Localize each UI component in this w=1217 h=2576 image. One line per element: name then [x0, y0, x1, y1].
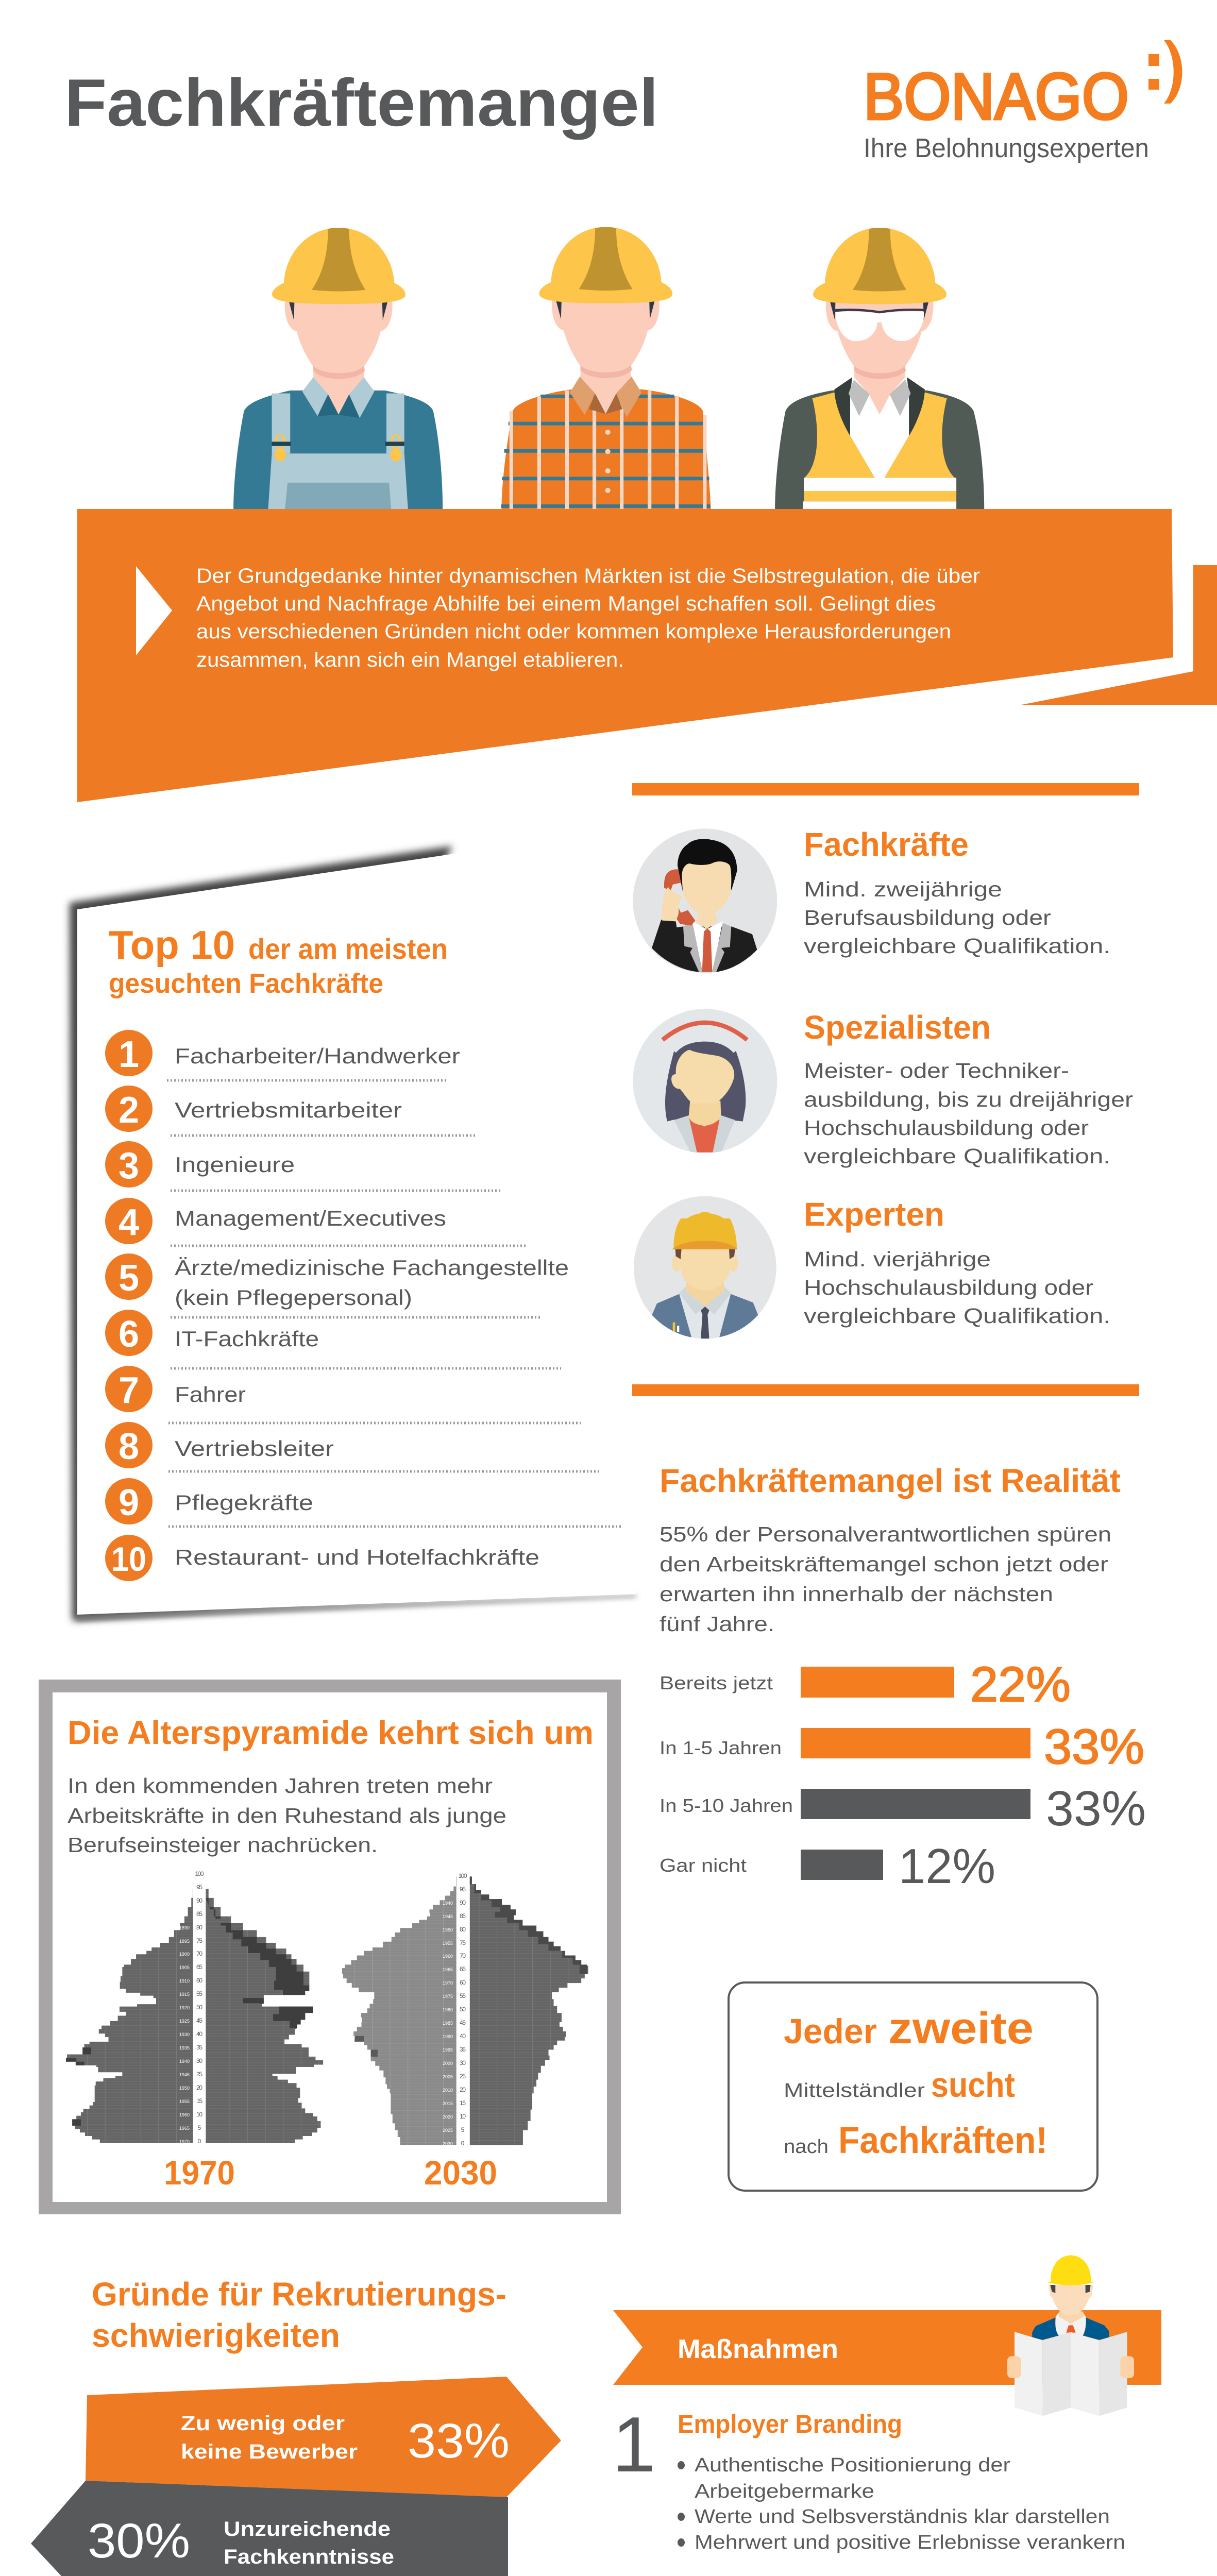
- list rows: 6: [119, 1314, 139, 1355]
- measure 1: Employer Branding: [612, 2401, 1125, 2553]
- heading: Gründe: [92, 2276, 506, 2354]
- panel: Spezialisten: [633, 1009, 1133, 1168]
- chart: population pyramid 1970: 75: [196, 1937, 202, 1944]
- panel: Fachkräfte: Berufsausbildung oder: [804, 906, 1051, 929]
- list rows: Fahrer: [175, 1382, 246, 1406]
- callout: Jeder zweite: nach: [784, 2136, 829, 2158]
- chart: population pyramid 2030: 1985: [443, 2021, 453, 2026]
- chart: population pyramid 2030: 55: [460, 1992, 466, 1999]
- chart: population pyramid 2030: 20: [460, 2086, 466, 2093]
- panel: top 10 list: [70, 846, 636, 1621]
- panel: Experten: Mind. vierjährige: [804, 1247, 991, 1271]
- icon: woman with headset: [633, 1009, 777, 1153]
- panel: Fachkräfte: vergleichbare Qualifikation.: [804, 934, 1110, 958]
- chart: population pyramid 1970: 1960: [179, 2112, 190, 2117]
- bar chart: timing: 12%: [899, 1839, 995, 1894]
- measure 1: Employer Branding: 1: [612, 2401, 656, 2488]
- chart: population pyramid 2030: 2020: [443, 2114, 453, 2120]
- heading: Fachkräftemangel ist Realität: Fachkräftemangel ist Realität: [660, 1462, 1121, 1499]
- callout: Jeder zweite: zweite: [888, 2004, 1034, 2053]
- heading: Alterspyramide: Die Alterspyramide kehrt sich um: [67, 1714, 594, 1751]
- chart: population pyramid 2030: 60: [460, 1979, 466, 1986]
- panel: Experten: [634, 1196, 1110, 1340]
- text block: 55 percent: den Arbeitskräftemangel schon jetzt oder: [660, 1552, 1108, 1576]
- bar chart: timing: 33%: [1044, 1719, 1144, 1774]
- bar chart: timing: [660, 1657, 1146, 1894]
- chart: population pyramid 2030: 65: [460, 1965, 466, 1973]
- chart: population pyramid 1970: 5: [198, 2124, 201, 2131]
- panel: intro banner: [77, 509, 1217, 802]
- list rows: 7: [119, 1370, 139, 1411]
- panel: intro banner: zusammen, kann sich ein Mangel etablieren.: [196, 649, 624, 671]
- list rows: 4: [119, 1202, 139, 1243]
- chart: population pyramid 1970: 1945: [179, 2072, 190, 2077]
- chart: population pyramid 2030: 85: [460, 1912, 466, 1920]
- chart: population pyramid 2030: 1940: [443, 1901, 453, 1906]
- bar chart: timing: Gar nicht: [660, 1855, 747, 1876]
- text block: 55 percent: fünf Jahre.: [660, 1612, 774, 1636]
- chart: population pyramid 2030: 1970: [443, 1980, 453, 1986]
- bar chart: timing: Bereits jetzt: [660, 1672, 773, 1693]
- chart: population pyramid 1970: 1940: [179, 2059, 190, 2064]
- chart: population pyramid 1970: 1895: [179, 1939, 190, 1944]
- chart: population pyramid 2030: 1960: [443, 1954, 453, 1959]
- arrow: Unzureichende Fachkenntnisse: 30%: [88, 2514, 190, 2568]
- measure 1: Employer Branding: Werte und Selbsverständnis klar darstellen: [695, 2506, 1110, 2528]
- list rows: 5: [119, 1258, 139, 1299]
- chart: population pyramid 1970: 95: [196, 1884, 202, 1891]
- panel: Fachkräfte: [633, 826, 1110, 973]
- text block: Alterspyramide: Berufseinsteiger nachrücken.: [67, 1833, 378, 1857]
- text block: Alterspyramide: [67, 1774, 506, 1857]
- panel: Experten: Experten: [804, 1196, 944, 1233]
- chart: population pyramid 1970: 20: [196, 2084, 202, 2091]
- chart: population pyramid 2030: 70: [460, 1952, 466, 1959]
- heading: top 10: Top 10: [109, 922, 235, 968]
- chart: population pyramid 1970: 1905: [179, 1965, 190, 1970]
- panel: intro banner: Angebot und Nachfrage Abhilfe bei einem Mangel schaffen soll. Gelingt dies: [196, 592, 936, 615]
- chart: population pyramid 1970: 0: [198, 2138, 201, 2145]
- list rows: Management/Executives: [175, 1206, 446, 1230]
- chart: population pyramid 1970: 50: [196, 2004, 202, 2011]
- icon: engineer with helmet: [634, 1196, 776, 1340]
- logo: BONAGO: BONAGO: [864, 60, 1129, 133]
- chart: population pyramid 1970: 60: [196, 1977, 202, 1984]
- chart: population pyramid 2030: 90: [460, 1899, 466, 1906]
- arrow: Unzureichende Fachkenntnisse: Unzureichende: [224, 2518, 391, 2540]
- text block: 55 percent: erwarten ihn innerhalb der nächsten: [660, 1582, 1053, 1606]
- chart: population pyramid 1970: 15: [196, 2097, 202, 2105]
- list rows: 8: [119, 1426, 139, 1467]
- panel: Spezialisten: Spezialisten: [804, 1009, 991, 1046]
- panel: Alterspyramide: [39, 1680, 621, 2214]
- bar chart: timing: In 5-10 Jahren: [660, 1795, 793, 1816]
- panel: Experten: vergleichbare Qualifikation.: [804, 1304, 1110, 1328]
- chart: population pyramid 1970: 80: [196, 1924, 202, 1931]
- panel: Fachkräfte: Fachkräfte: [804, 826, 969, 863]
- logo: BONAGO: Ihre Belohnungsexperten: [864, 133, 1149, 163]
- arrow: Zu wenig oder keine Bewerber: [86, 2377, 561, 2497]
- list rows: 10: [111, 1540, 146, 1578]
- list rows: Ingenieure: [175, 1153, 295, 1177]
- panel: Spezialisten: Meister- oder Techniker-: [804, 1059, 1069, 1082]
- illustration: three workers: [233, 227, 984, 510]
- chart: population pyramid 2030: 2010: [443, 2088, 453, 2093]
- chart: population pyramid 1970: 25: [196, 2071, 202, 2078]
- bar chart: timing: 22%: [970, 1657, 1071, 1712]
- callout: Jeder zweite: Fachkräften!: [838, 2120, 1047, 2161]
- chart: population pyramid 2030: 95: [460, 1886, 466, 1893]
- chart: population pyramid 1970: 10: [196, 2111, 202, 2118]
- list rows: Vertriebsmitarbeiter: [175, 1098, 402, 1122]
- chart: population pyramid 1970: 1935: [179, 2045, 190, 2050]
- chart: population pyramid 1970: 35: [196, 2044, 202, 2051]
- year labels: 2030: [424, 2154, 497, 2192]
- chart: population pyramid 2030: 75: [460, 1939, 466, 1946]
- chart: population pyramid 2030: 2030: [443, 2141, 453, 2146]
- list rows: 3: [119, 1145, 139, 1187]
- icon: man on the phone: [633, 828, 777, 973]
- measure 1: Employer Branding: Authentische Positionierung der: [695, 2454, 1010, 2476]
- text block: Alterspyramide: Arbeitskräfte in den Ruhestand als junge: [67, 1804, 506, 1827]
- chart: population pyramid 1970: 1890: [179, 1925, 190, 1930]
- arrow: Zu wenig oder keine Bewerber: Zu wenig oder: [181, 2412, 345, 2435]
- chart: population pyramid 2030: 2025: [443, 2128, 453, 2133]
- chart: population pyramid 2030: 80: [460, 1926, 466, 1933]
- chart: population pyramid 1970: 30: [196, 2057, 202, 2064]
- chart: population pyramid 1970: 65: [196, 1963, 202, 1971]
- list rows: Ärzte/medizinische Fachangestellte: [175, 1256, 569, 1280]
- chart: population pyramid 1970: 1950: [179, 2086, 190, 2091]
- banner: Maßnahmen: Maßnahmen: [678, 2334, 838, 2364]
- list rows: Pflegekräfte: [175, 1490, 313, 1515]
- list rows: (kein Pflegepersonal): [175, 1285, 412, 1310]
- banner: Maßnahmen: [613, 2310, 1161, 2385]
- worker in plaid shirt: [501, 227, 711, 509]
- chart: population pyramid 2030: [342, 1872, 588, 2147]
- chart: population pyramid 1970: 40: [196, 2030, 202, 2038]
- chart: population pyramid 1970: 1930: [179, 2032, 190, 2037]
- heading: Gründe: Gründe für Rekrutierungs-: [92, 2276, 506, 2313]
- panel: Spezialisten: vergleichbare Qualifikation.: [804, 1144, 1110, 1168]
- chart: population pyramid 1970: 1900: [179, 1952, 190, 1957]
- arrow: Zu wenig oder keine Bewerber: 33%: [408, 2414, 510, 2468]
- year labels: 1970: [164, 2154, 235, 2192]
- chart: population pyramid 1970: 85: [196, 1910, 202, 1918]
- arrow: Unzureichende Fachkenntnisse: Fachkenntnisse: [224, 2546, 394, 2568]
- chart: population pyramid 2030: 1950: [443, 1927, 453, 1933]
- chart: population pyramid 2030: 40: [460, 2032, 466, 2040]
- chart: population pyramid 2030: 45: [460, 2019, 466, 2026]
- worker in safety vest: [775, 228, 984, 510]
- divider bar: top: [632, 783, 1139, 795]
- chart: population pyramid 2030: 25: [460, 2073, 466, 2080]
- chart: population pyramid 1970: 1965: [179, 2126, 190, 2131]
- list rows: 1: [119, 1034, 139, 1075]
- chart: population pyramid 1970: 90: [196, 1897, 202, 1904]
- panel: intro banner: Der Grundgedanke hinter dynamischen Märkten ist die Selbstregulation, die über: [196, 565, 980, 587]
- chart: population pyramid 2030: 30: [460, 2059, 466, 2066]
- chart: population pyramid 2030: 50: [460, 2006, 466, 2013]
- measure 1: Employer Branding: Mehrwert und positive Erlebnisse verankern: [695, 2532, 1125, 2553]
- chart: population pyramid 2030: 1975: [443, 1994, 453, 1999]
- chart: population pyramid 1970: 70: [196, 1950, 202, 1957]
- panel: Spezialisten: ausbildung, bis zu dreijähriger: [804, 1088, 1133, 1111]
- chart: population pyramid 1970: 1970: [179, 2139, 190, 2144]
- title: Fachkräftemangel: [64, 65, 658, 140]
- heading: top 10: gesuchten Fachkräfte: [109, 968, 383, 999]
- heading: top 10: [109, 922, 448, 999]
- chart: population pyramid 2030: 0: [461, 2140, 465, 2147]
- panel: Spezialisten: Hochschulausbildung oder: [804, 1116, 1089, 1140]
- callout: Jeder zweite: sucht: [931, 2065, 1015, 2105]
- arrow: Zu wenig oder keine Bewerber: keine Bewerber: [181, 2441, 358, 2463]
- chart: population pyramid 1970: 1910: [179, 1978, 190, 1984]
- chart: population pyramid 2030: 5: [461, 2126, 465, 2133]
- icon: worker with map: [1007, 2255, 1134, 2416]
- list rows: Vertriebsleiter: [175, 1436, 334, 1461]
- callout: Jeder zweite: [729, 1982, 1097, 2191]
- list rows: Facharbeiter/Handwerker: [175, 1044, 460, 1068]
- chart: population pyramid 2030: 1945: [443, 1914, 453, 1919]
- chart: population pyramid 1970: 1920: [179, 2005, 190, 2010]
- heading: Gründe: schwierigkeiten: [92, 2317, 340, 2354]
- arrow: Unzureichende Fachkenntnisse: [31, 2481, 508, 2576]
- panel: Fachkräfte: Mind. zweijährige: [804, 877, 1002, 901]
- bar chart: timing: 33%: [1046, 1781, 1146, 1836]
- chart: population pyramid 1970: [66, 1870, 323, 2145]
- list rows: IT-Fachkräfte: [175, 1327, 319, 1351]
- chart: population pyramid 2030: 1955: [443, 1941, 453, 1946]
- chart: population pyramid 2030: 1990: [443, 2034, 453, 2039]
- chart: population pyramid 2030: 10: [460, 2113, 466, 2120]
- chart: population pyramid 2030: 2015: [443, 2101, 453, 2106]
- chart: population pyramid 1970: 100: [195, 1870, 204, 1877]
- callout: Jeder zweite: Jeder: [784, 2012, 877, 2051]
- chart: population pyramid 1970: 1915: [179, 1992, 190, 1997]
- chart: population pyramid 2030: 2005: [443, 2074, 453, 2079]
- logo: BONAGO: [864, 40, 1182, 163]
- list rows: 9: [119, 1482, 139, 1523]
- chart: population pyramid 2030: 100: [459, 1872, 467, 1879]
- chart: population pyramid 2030: 1995: [443, 2047, 453, 2053]
- chart: population pyramid 1970: 1955: [179, 2099, 190, 2104]
- chart: population pyramid 2030: 1965: [443, 1967, 453, 1972]
- text block: 55 percent: [660, 1522, 1111, 1636]
- list rows: 2: [119, 1090, 139, 1131]
- list rows: Restaurant- und Hotelfachkräfte: [175, 1545, 539, 1569]
- chart: population pyramid 2030: 15: [460, 2099, 466, 2107]
- panel: intro banner: aus verschiedenen Gründen nicht oder kommen komplexe Herausforderungen: [196, 620, 951, 643]
- list rows: [105, 1030, 621, 1581]
- chart: population pyramid 2030: 1980: [443, 2007, 453, 2012]
- worker in overalls: [233, 228, 443, 509]
- text block: Alterspyramide: In den kommenden Jahren treten mehr: [67, 1774, 493, 1798]
- bar chart: timing: In 1-5 Jahren: [660, 1737, 782, 1758]
- chart: population pyramid 1970: 45: [196, 2017, 202, 2024]
- chart: population pyramid 1970: 1925: [179, 2019, 190, 2024]
- callout: Jeder zweite: Mittelständler: [784, 2080, 925, 2102]
- year labels: [164, 2154, 497, 2192]
- panel: Experten: Hochschulausbildung oder: [804, 1276, 1093, 1299]
- chart: population pyramid 2030: 35: [460, 2046, 466, 2053]
- chart: population pyramid 1970: 55: [196, 1990, 202, 1997]
- measure 1: Employer Branding: Arbeitgebermarke: [695, 2481, 874, 2502]
- chart: population pyramid 2030: 2000: [443, 2061, 453, 2066]
- divider bar: bottom: [632, 1384, 1139, 1396]
- heading: top 10: der am meisten: [248, 933, 448, 965]
- text block: 55 percent: 55% der Personalverantwortlichen spüren: [660, 1522, 1111, 1546]
- measure 1: Employer Branding: Employer Branding: [678, 2410, 902, 2438]
